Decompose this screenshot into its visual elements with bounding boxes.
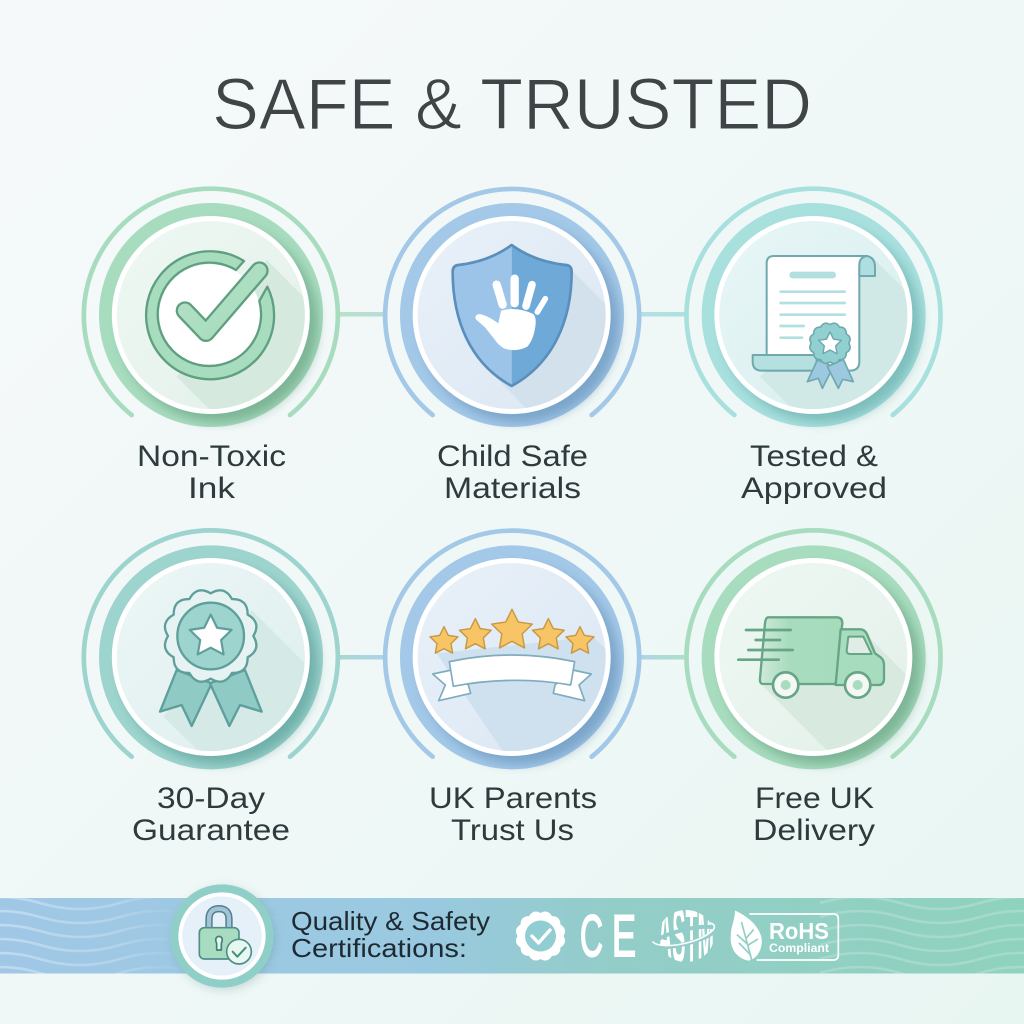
icon: check in ring <box>146 251 274 379</box>
label: Non-Toxic Ink: Non-Toxic <box>137 440 286 473</box>
label: Child Safe Materials: Child Safe <box>437 440 588 473</box>
badge: UK parents trust us <box>382 528 642 770</box>
connectors: row one and two <box>339 312 686 660</box>
icon: padlock badge <box>170 884 274 989</box>
logo: RoHS compliant: Compliant <box>769 943 829 955</box>
label: Tested & Approved: Approved <box>741 472 887 505</box>
label: Tested & Approved <box>741 440 887 505</box>
label: Tested & Approved: Tested & <box>750 440 878 473</box>
label: UK Parents Trust Us <box>429 782 597 847</box>
icon: shield with hand <box>453 245 572 386</box>
label: Non-Toxic Ink <box>137 440 286 505</box>
logo: CE mark: C <box>580 904 603 969</box>
label: Free UK Delivery <box>753 782 875 847</box>
badge: free UK delivery <box>684 528 943 770</box>
label: Child Safe Materials: Materials <box>444 472 581 505</box>
logo: ASTM <box>652 910 716 962</box>
icon: award rosette <box>160 590 262 726</box>
badge: tested and approved <box>684 186 943 428</box>
label: 30-Day Guarantee <box>132 782 290 847</box>
badge: 30-day guarantee <box>82 528 340 771</box>
logo: RoHS compliant <box>731 911 838 961</box>
certification band <box>0 897 1024 979</box>
label: 30-Day Guarantee: 30-Day <box>157 782 265 815</box>
icon: five stars and banner <box>430 609 594 701</box>
heading: quality and safety certifications <box>291 906 490 963</box>
label: Child Safe Materials <box>437 440 588 505</box>
label: Free UK Delivery: Free UK <box>755 782 874 815</box>
logo: RoHS compliant: RoHS <box>769 918 829 944</box>
icon: quality seal <box>517 912 564 960</box>
badge: child safe materials <box>382 186 642 428</box>
text: ASTM <box>658 891 714 979</box>
logo: CE mark: E <box>612 904 636 969</box>
title: SAFE & TRUSTED <box>212 65 812 145</box>
label: UK Parents Trust Us: Trust Us <box>451 814 574 847</box>
badge: non-toxic ink <box>82 186 340 428</box>
heading: quality and safety certifications: Certifications: <box>291 933 467 963</box>
icon: delivery truck <box>738 617 884 698</box>
label: 30-Day Guarantee: Guarantee <box>132 814 290 847</box>
icon: certificate scroll with rosette <box>753 256 875 388</box>
label: Non-Toxic Ink: Ink <box>188 472 236 505</box>
heading: quality and safety certifications: Quality & Safety <box>291 906 490 936</box>
label: UK Parents Trust Us: UK Parents <box>429 782 597 815</box>
label: Free UK Delivery: Delivery <box>753 814 875 847</box>
